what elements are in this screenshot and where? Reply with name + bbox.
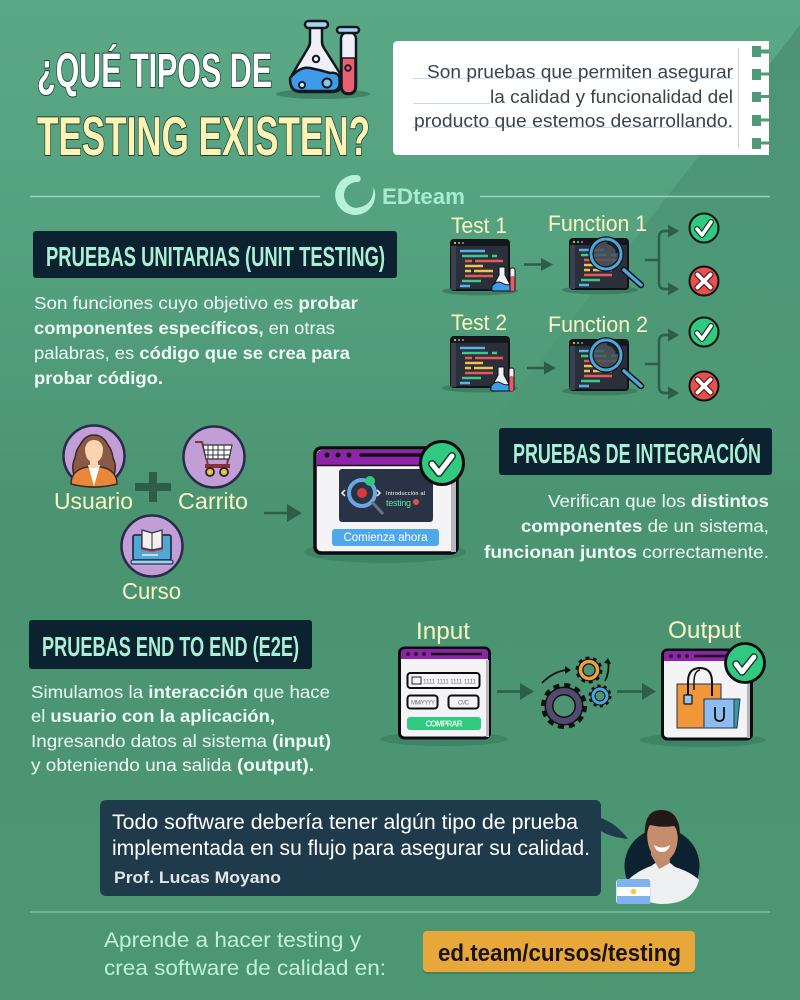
icon: carrito [184, 426, 244, 488]
diagram: unit test flow 1 [442, 211, 718, 296]
heading: pruebas end to end [29, 620, 312, 669]
text: integration description [484, 491, 769, 562]
brand divider with EDteam logo [30, 175, 770, 215]
illustration: integrated course window: testing [386, 498, 411, 508]
text: unit testing description: componentes específicos, en otras [34, 318, 335, 338]
text: end to end description: Ingresando datos al sistema (input) [31, 731, 331, 751]
icon: usuario avatar [64, 426, 124, 487]
text: integration description: Verifican que los distintos [548, 491, 769, 511]
divider [30, 911, 770, 913]
heading: pruebas end to end: PRUEBAS END TO END (E2E) [42, 631, 299, 662]
illustration: input form window: 1111 1111 1111 1111 [423, 678, 476, 686]
text: call to action: crea software de calidad en: [104, 957, 386, 980]
labels: usuario, carrito, curso [54, 488, 248, 604]
diagram: unit test flow 2 [442, 310, 718, 400]
panel: definition note: Son pruebas que permiten asegurar [427, 61, 733, 82]
heading: pruebas unitarias: PRUEBAS UNITARIAS (UNIT TESTING) [46, 241, 385, 272]
callout: professor quote [100, 800, 628, 896]
text: call to action [104, 929, 386, 980]
text: end to end description: Simulamos la interacción que hace [31, 682, 330, 702]
icon: flag of Argentina [616, 879, 650, 904]
icon: lab flask and test tube [276, 21, 370, 99]
illustration: integrated course window: Introducción al [386, 491, 425, 497]
title [37, 44, 370, 167]
title: ¿QUÉ TIPOS DE [37, 44, 272, 98]
illustration: output window with shopping bags [640, 617, 766, 747]
icon: plus [135, 472, 171, 502]
illustration: input form window: Input [416, 618, 470, 645]
text: integration description: componentes de un sistema, [521, 516, 769, 536]
portrait: Prof. Lucas Moyano [624, 810, 700, 904]
callout: professor quote: Prof. Lucas Moyano [114, 869, 281, 887]
title: TESTING EXISTEN? [37, 105, 370, 167]
panel: definition note: la calidad y funcionalidad del [490, 86, 733, 107]
text: unit testing description: probar código. [34, 368, 163, 388]
arrow: process to output [617, 683, 656, 700]
arrow: input to process [497, 683, 534, 700]
arrow: to integration window [264, 504, 302, 522]
icon: curso laptop with book [122, 516, 182, 576]
text: unit testing description [34, 293, 358, 388]
illustration: integrated course window [304, 442, 466, 563]
diagram: unit test flow 2: Test 2 [451, 310, 507, 335]
button: course link [423, 931, 695, 974]
illustration: output window with shopping bags: Output [668, 617, 741, 644]
illustration: input form window: CVC [458, 700, 470, 706]
illustration: integrated course window: Comienza ahora [344, 532, 428, 544]
button: course link: ed.team/cursos/testing [438, 940, 681, 967]
labels: usuario, carrito, curso: Carrito [178, 488, 248, 514]
callout: professor quote: Todo software debería tener algún tipo de prueba [112, 811, 578, 834]
text: end to end description: el usuario con la aplicación, [31, 706, 275, 726]
text: end to end description: y obteniendo una salida (output). [31, 755, 314, 775]
brand divider with EDteam logo: EDteam [382, 184, 465, 209]
icon: process gears [542, 658, 611, 725]
labels: usuario, carrito, curso: Usuario [54, 488, 133, 514]
diagram: unit test flow 2: Function 2 [548, 312, 648, 337]
panel: definition note [393, 41, 769, 155]
labels: usuario, carrito, curso: Curso [122, 578, 181, 604]
text: integration description: funcionan juntos correctamente. [484, 542, 769, 562]
text: call to action: Aprende a hacer testing y [104, 929, 362, 952]
text: end to end description [31, 682, 331, 775]
illustration: input form window: COMPRAR [426, 720, 463, 728]
callout: professor quote: implementada en su flujo para asegurar su calidad. [112, 837, 590, 860]
text: unit testing description: Son funciones cuyo objetivo es probar [34, 293, 358, 313]
heading: pruebas de integracion [499, 428, 772, 475]
illustration: input form window: MM/YYYY [411, 700, 435, 706]
text: unit testing description: palabras, es código que se crea para [34, 343, 350, 363]
diagram: unit test flow 1: Test 1 [451, 213, 507, 238]
panel: definition note: producto que estemos desarrollando. [414, 110, 733, 131]
illustration: input form window [380, 618, 508, 746]
heading: pruebas unitarias [33, 231, 397, 278]
diagram: unit test flow 1: Function 1 [548, 211, 647, 236]
